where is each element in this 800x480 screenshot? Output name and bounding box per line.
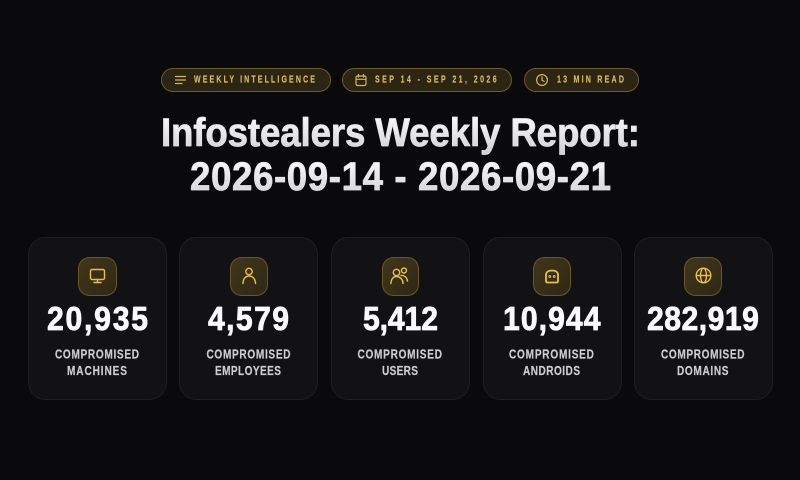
icon: menu lines <box>176 76 186 84</box>
title: 2026-09-14 - 2026-09-21 <box>190 155 611 199</box>
panel: compromised androids: ANDROIDS <box>523 365 580 378</box>
panel: compromised androids: 10,944 <box>503 300 601 337</box>
panel: compromised employees: EMPLOYEES <box>215 365 281 378</box>
tag: date range: SEP 14 - SEP 21, 2026 <box>375 73 497 85</box>
panel: compromised employees <box>180 238 318 400</box>
tag: read time <box>524 68 638 92</box>
panel: compromised androids: COMPROMISED <box>509 349 594 362</box>
panel: compromised domains <box>634 238 772 400</box>
panel: compromised androids <box>484 238 622 400</box>
icon: clock <box>537 75 547 85</box>
icon: monitor <box>90 270 104 282</box>
tag: read time: 13 MIN READ <box>557 73 624 85</box>
panel: compromised employees: COMPROMISED <box>206 349 291 362</box>
icon: users <box>391 268 408 284</box>
tag: date range <box>342 68 512 92</box>
panel: compromised machines: 20,935 <box>47 300 148 337</box>
panel: compromised employees: 4,579 <box>208 300 289 337</box>
panel: compromised machines: MACHINES <box>67 365 127 378</box>
panel: compromised domains: 282,919 <box>647 300 759 337</box>
panel: compromised users: USERS <box>382 365 418 378</box>
panel: compromised machines: COMPROMISED <box>55 349 139 362</box>
title: Infostealers Weekly Report: <box>161 111 640 155</box>
tag: weekly intelligence <box>162 68 330 92</box>
icon: person <box>243 268 256 284</box>
icon: calendar <box>356 74 366 86</box>
panel: compromised users: 5,412 <box>363 300 438 337</box>
panel: compromised users <box>332 238 470 400</box>
panel: compromised domains: COMPROMISED <box>661 349 745 362</box>
panel: compromised domains: DOMAINS <box>677 365 729 378</box>
panel: compromised machines <box>28 238 166 400</box>
panel: compromised users: COMPROMISED <box>358 349 442 362</box>
tag: weekly intelligence: WEEKLY INTELLIGENCE <box>194 73 315 85</box>
icon: globe <box>696 268 711 283</box>
icon: android <box>546 270 558 282</box>
title <box>161 111 640 199</box>
